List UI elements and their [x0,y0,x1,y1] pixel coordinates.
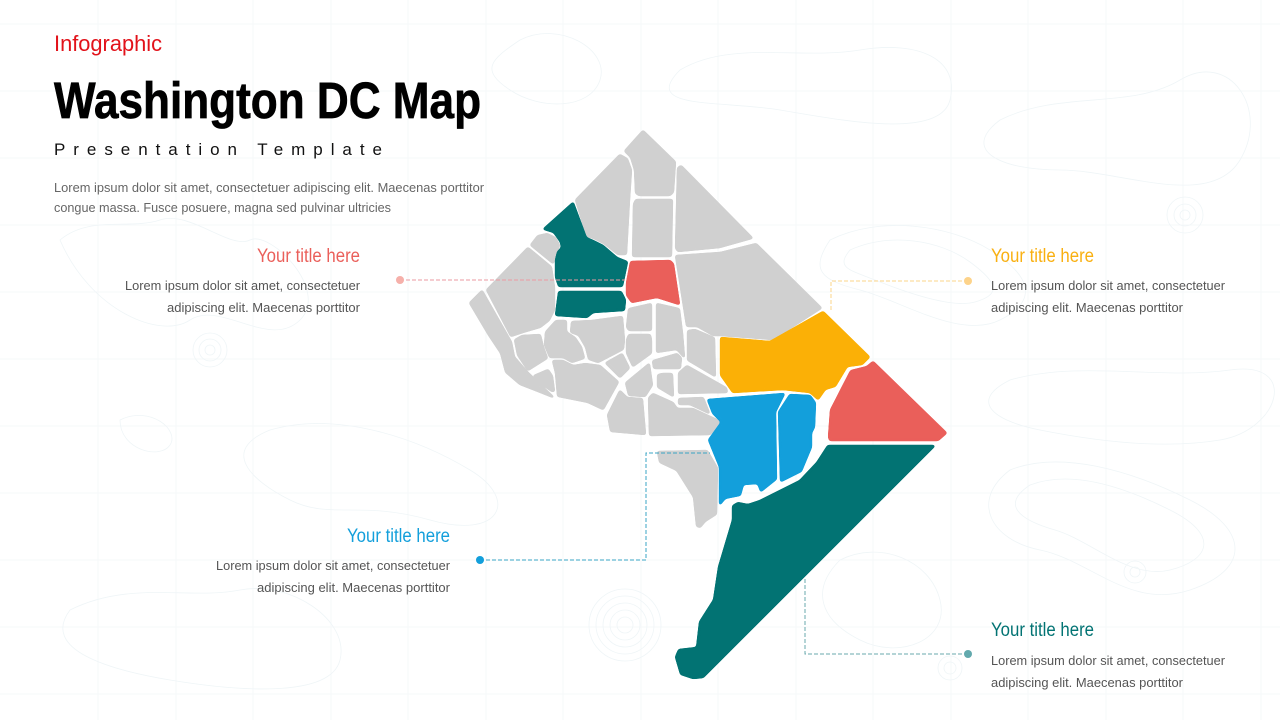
teal title: Your title here [991,620,1094,641]
callout: blue [216,453,710,595]
orange body: adipiscing elit. Maecenas porttitor [991,301,1183,315]
orange title: Your title here [991,246,1094,267]
blue body: adipiscing elit. Maecenas porttitor [257,581,450,595]
ward: orange [721,312,869,399]
orange body [991,279,1225,315]
teal body: adipiscing elit. Maecenas porttitor [991,676,1183,690]
callout: orange [831,246,1225,315]
intro text: Lorem ipsum dolor sit amet, consectetuer adipiscing elit. Maecenas porttitor [54,181,484,195]
ward: red centre [627,261,679,304]
title: Washington DC Map [54,72,481,129]
ward: teal upper [544,203,627,286]
pink body [125,279,360,315]
intro text [54,181,484,215]
pink title: Your title here [257,246,360,267]
teal body [991,654,1225,690]
pink body: Lorem ipsum dolor sit amet, consectetuer [125,279,360,293]
ward: blue west [708,394,784,504]
orange leader line [831,277,972,312]
callout: pink [125,246,625,315]
callout: teal [805,579,1225,690]
map: Washington DC wards [470,131,946,678]
pink leader line [396,276,625,284]
blue title: Your title here [347,526,450,547]
orange body: Lorem ipsum dolor sit amet, consectetuer [991,279,1225,293]
teal leader line [805,579,972,658]
intro text: congue massa. Fusce posuere, magna sed pulvinar ultricies [54,201,391,215]
label: Infographic: Infographic [54,31,162,56]
pink body: adipiscing elit. Maecenas porttitor [167,301,360,315]
blue body: Lorem ipsum dolor sit amet, consectetuer [216,559,450,573]
subtitle: Presentation Template [54,140,382,159]
ward: red east [829,362,946,440]
ward: blue east [779,395,815,481]
blue body [216,559,450,595]
ward: teal lower [556,292,625,317]
teal body: Lorem ipsum dolor sit amet, consectetuer [991,654,1225,668]
gray neighbourhoods [470,131,821,527]
ward: teal south [676,446,934,678]
blue leader line [476,453,710,564]
